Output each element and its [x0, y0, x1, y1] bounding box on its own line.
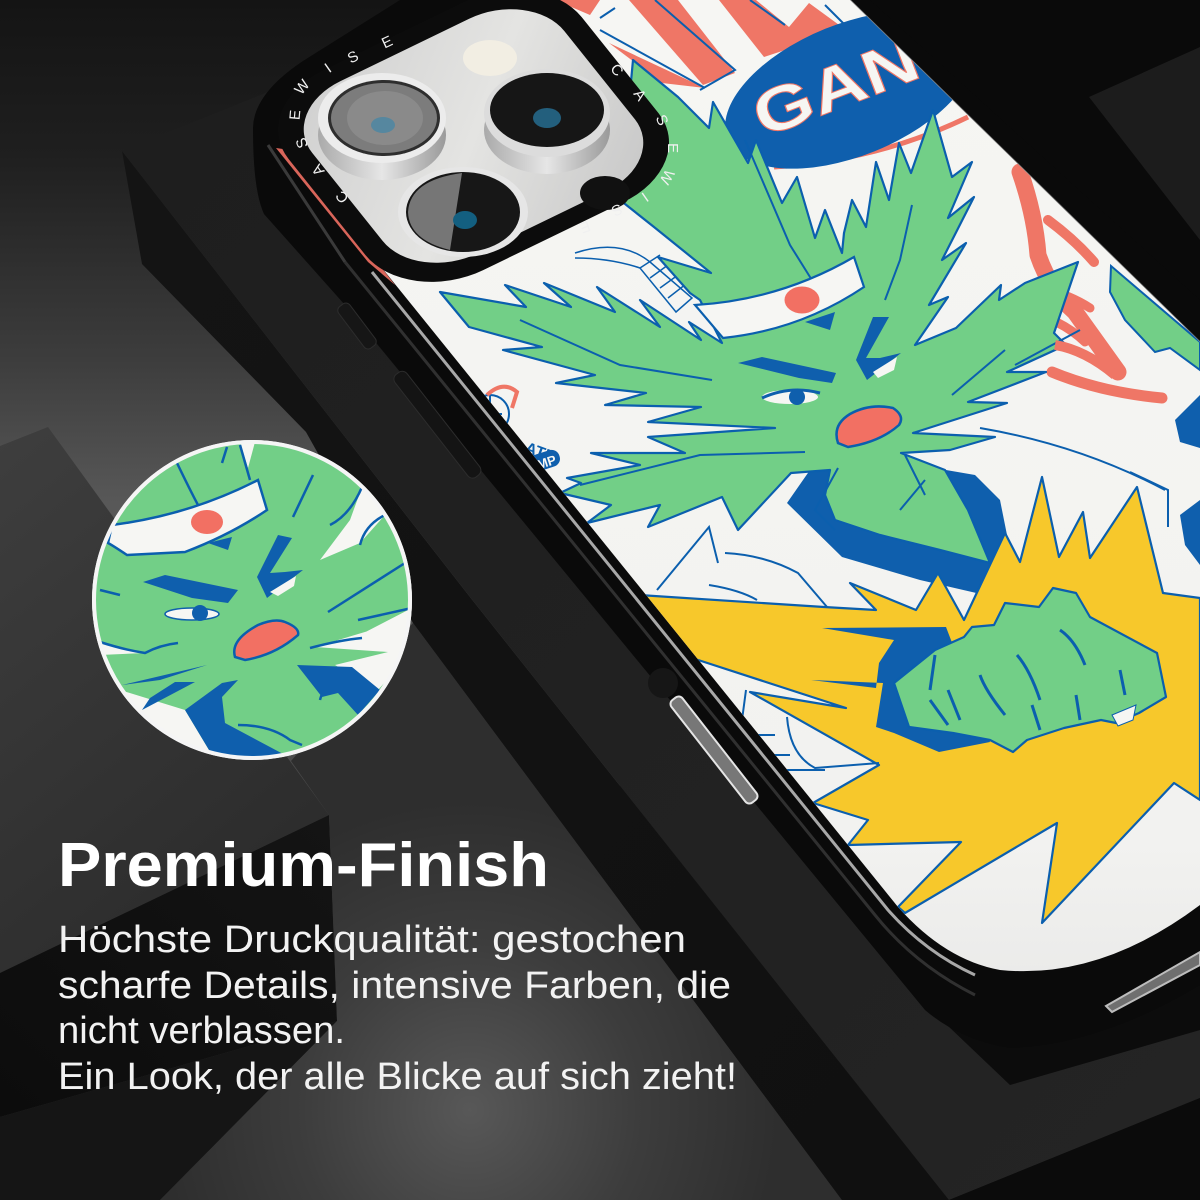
- body text: Ein Look, der alle Blicke auf sich zieht!: [58, 1056, 737, 1098]
- leaf vein lines: [520, 140, 1080, 530]
- coral title letters: [555, 0, 846, 88]
- white headband with red dot: [695, 257, 864, 338]
- casewise ring lettering: [287, 33, 681, 236]
- casewise ring lettering: A: [630, 86, 649, 104]
- lidar: [580, 176, 630, 210]
- casewise ring lettering: S: [652, 112, 671, 128]
- black ring: [247, 0, 700, 307]
- casewise ring lettering: W: [291, 76, 314, 98]
- leaf face: [738, 317, 901, 447]
- cannabis leaf character: [440, 60, 1078, 563]
- glass plate: [279, 0, 668, 283]
- casewise ring lettering: C: [332, 187, 352, 206]
- blue title outlines: [600, 0, 845, 90]
- eyes: [143, 575, 238, 603]
- stone block: lower left steps: [0, 427, 600, 1200]
- printed screen artwork: [384, 0, 1200, 972]
- zoom detail circle: [90, 440, 415, 765]
- side buttons: [336, 301, 760, 806]
- casewise ring lettering: E: [379, 33, 395, 52]
- body text: nicht verblassen.: [58, 1010, 345, 1052]
- casewise ring lettering: I: [638, 188, 651, 205]
- phone drop shadow: [905, 960, 1200, 1085]
- white background gaps: [100, 442, 412, 765]
- coral underline arc: [774, 117, 968, 167]
- phone: [253, 0, 1200, 1085]
- casewise ring lettering: C: [607, 61, 627, 80]
- blue robe shapes: [122, 665, 380, 765]
- casewise ring lettering: S: [609, 200, 625, 219]
- white robe outlines: [657, 527, 827, 607]
- robe details at right edge: [980, 395, 1200, 565]
- casewise ring lettering: S: [293, 135, 312, 150]
- body text: scharfe Details, intensive Farben, die: [58, 965, 731, 1007]
- phone case body: [253, 0, 1200, 1048]
- lens bottom: [398, 167, 528, 257]
- casewise ring lettering: W: [655, 166, 677, 188]
- camera island: [247, 0, 700, 307]
- blue edge stroke: [383, 283, 429, 333]
- lens top left: [318, 73, 446, 180]
- headband: [108, 480, 267, 555]
- body text: Höchste Druckqualität: gestochen: [58, 919, 686, 961]
- green arm at right edge: [1110, 266, 1200, 370]
- blue badge with GAN lettering: [726, 16, 952, 169]
- coral flames: [1020, 172, 1162, 398]
- yellow burst: [639, 477, 1200, 923]
- line details lower left: [742, 690, 879, 770]
- body text: [58, 919, 737, 1098]
- stone block: lit face: [160, 623, 842, 1200]
- hatched sleeve: [575, 247, 692, 312]
- blue badge with GAN lettering: GAN: [743, 25, 929, 151]
- flash: [463, 40, 517, 76]
- blue robe ring: [787, 470, 1007, 593]
- flame overlapping leaf: [1055, 345, 1115, 375]
- heading: Premium-Finish: [58, 831, 549, 900]
- casewise ring lettering: S: [345, 48, 362, 67]
- casewise ring lettering: A: [309, 161, 328, 179]
- casewise ring lettering: I: [322, 60, 335, 77]
- enlarged leaf lines: [100, 445, 412, 745]
- coral print beside the island: [276, 148, 395, 285]
- casewise ring lettering: E: [664, 143, 681, 153]
- lens top right: [484, 69, 610, 174]
- mouth: [234, 621, 298, 660]
- case rim highlights: [268, 0, 1200, 995]
- bottom port: [1106, 952, 1200, 1012]
- mouth: [836, 406, 901, 447]
- small blue logo: [484, 384, 560, 470]
- green fist: [811, 588, 1166, 752]
- casewise ring lettering: E: [577, 217, 592, 236]
- small blue logo: ATR: [523, 440, 559, 467]
- small blue logo: MP: [535, 452, 558, 472]
- casewise ring lettering: E: [287, 109, 304, 121]
